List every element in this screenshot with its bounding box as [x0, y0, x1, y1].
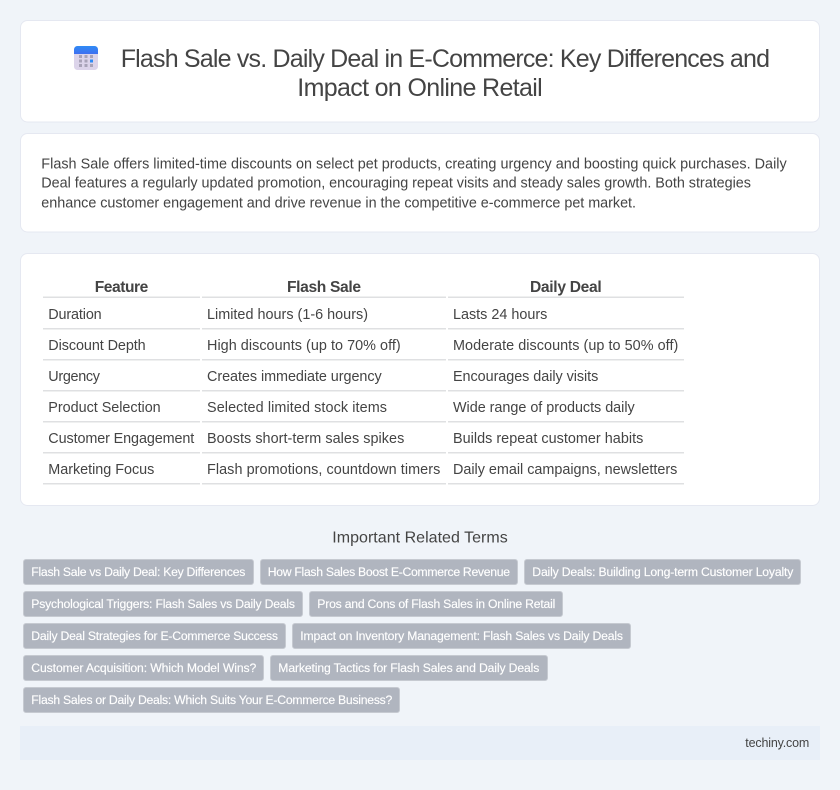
heading: important related terms: Important Related Terms [332, 529, 508, 546]
tag: customer acquisition: Customer Acquisition: Which Model Wins? [31, 661, 257, 675]
tag: pros and cons [310, 592, 562, 616]
text block: summary: Flash Sale offers limited-time discounts on select pet products, creating urgency and boosting quick purchases. Daily [41, 156, 787, 172]
tag: inventory management: Impact on Inventory Management: Flash Sales vs Daily Deals [300, 629, 623, 643]
table row: customer engagement: Boosts short-term sales spikes [207, 431, 404, 447]
table row: marketing focus: Flash promotions, countdown timers [207, 462, 440, 478]
tag: boost revenue [260, 560, 518, 584]
table row: duration: Duration [48, 307, 102, 323]
tag: marketing tactics: Marketing Tactics for Flash Sales and Daily Deals [278, 661, 539, 675]
table row: urgency: Encourages daily visits [453, 369, 598, 385]
tag: customer loyalty [524, 560, 800, 584]
tag: psychological triggers: Psychological Triggers: Flash Sales vs Daily Deals [31, 597, 295, 611]
text block: summary: enhance customer engagement and drive revenue in the competitive e-commerce pet market. [41, 195, 636, 211]
footer: techiny.com [745, 736, 809, 750]
table header row: Feature [95, 279, 149, 296]
table row: duration: Limited hours (1-6 hours) [207, 307, 368, 323]
title: Impact on Online Retail [297, 74, 543, 102]
table row: urgency [43, 369, 684, 392]
tag: customer acquisition [24, 656, 264, 680]
table row: product selection: Selected limited stock items [207, 400, 387, 416]
table row: discount depth: Moderate discounts (up to 50% off) [453, 338, 678, 354]
table row: discount depth: Discount Depth [48, 338, 146, 354]
table row: duration [43, 307, 684, 330]
text block: summary: Deal features a regularly updated promotion, encouraging repeat visits and steady sales growth. Both strategies [41, 176, 751, 192]
table row: duration: Lasts 24 hours [453, 307, 547, 323]
panel: header [20, 20, 820, 122]
tag: which suits your business [24, 688, 400, 712]
table header row: Daily Deal [530, 279, 602, 296]
table row: customer engagement: Customer Engagement [48, 431, 194, 447]
tag: daily deal strategies: Daily Deal Strategies for E-Commerce Success [31, 629, 278, 643]
panel: introduction [20, 134, 820, 232]
tag: which suits your business: Flash Sales or Daily Deals: Which Suits Your E-Commerce Business? [31, 693, 393, 707]
tag: pros and cons: Pros and Cons of Flash Sales in Online Retail [317, 597, 555, 611]
tag: psychological triggers [24, 592, 302, 616]
tag: key differences [24, 560, 254, 584]
table row: discount depth [43, 338, 684, 360]
panel: comparison table [20, 254, 820, 506]
table row: urgency: Urgency [48, 369, 101, 385]
footer [20, 726, 820, 760]
icon: calendar [74, 46, 98, 70]
tag: marketing tactics [270, 656, 548, 680]
tag: daily deal strategies [24, 624, 286, 648]
tag: boost revenue: How Flash Sales Boost E-Commerce Revenue [268, 565, 510, 579]
table row: marketing focus: Marketing Focus [48, 462, 154, 478]
table row: product selection: Product Selection [48, 400, 161, 416]
table header row [43, 279, 684, 298]
table row: urgency: Creates immediate urgency [207, 369, 382, 385]
tag: customer loyalty: Daily Deals: Building Long-term Customer Loyalty [532, 565, 794, 579]
table row: discount depth: High discounts (up to 70% off) [207, 338, 401, 354]
table row: customer engagement [43, 431, 684, 454]
tag: inventory management [292, 624, 630, 648]
table row: marketing focus: Daily email campaigns, newsletters [453, 462, 677, 478]
table row: product selection [43, 400, 684, 422]
title: Flash Sale vs. Daily Deal in E-Commerce: Key Differences and [121, 45, 770, 73]
table header row: Flash Sale [287, 279, 361, 296]
tag: key differences: Flash Sale vs Daily Deal: Key Differences [31, 565, 245, 579]
text block: summary [41, 156, 787, 211]
table row: customer engagement: Builds repeat customer habits [453, 431, 643, 447]
panel: related terms [24, 529, 800, 712]
table row: marketing focus [43, 462, 684, 484]
table row: product selection: Wide range of products daily [453, 400, 635, 416]
title [121, 45, 770, 102]
